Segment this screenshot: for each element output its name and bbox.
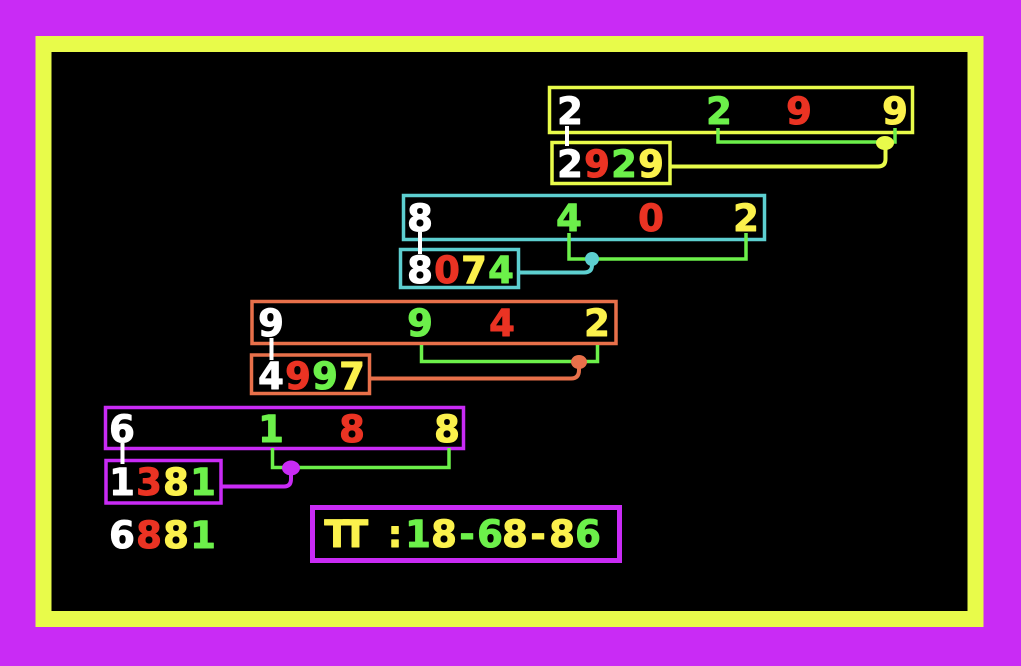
green bracket [569,233,746,259]
result digits 4997: 7 [339,355,365,398]
TT result callout: T [324,513,350,556]
top digits 6 1 8 8: 8 [434,408,460,451]
result digits 4997 [258,355,365,398]
top digits 9 9 4 2: 9 [258,302,284,345]
result digits 1381 [109,461,216,504]
TT result callout [312,508,620,560]
group 2: teal row [400,196,764,292]
top digits 9 9 4 2 [258,302,610,345]
green bracket [718,128,895,142]
top digits 8 4 0 2 [407,197,759,240]
result digits 4997: 9 [312,355,338,398]
TT result callout: 8 [549,513,575,556]
top digits 2 2 9 9: 9 [882,90,908,133]
top digits 8 4 0 2: 0 [638,197,664,240]
TT result callout: 8 [502,513,528,556]
orange connector with dot [370,355,587,378]
result box [552,142,670,184]
white link [270,338,274,360]
result digits 8074: 0 [434,249,460,292]
yellow connector with dot [671,136,894,166]
green bracket [272,448,449,468]
white link [418,232,422,254]
result digits 8074: 8 [407,249,433,292]
result digits 1381: 1 [109,461,135,504]
result box [106,460,221,503]
result digits 2929 [557,143,664,186]
TT result callout: : [388,513,402,556]
top digits 6 1 8 8: 8 [339,408,365,451]
TT result callout: T [343,513,369,556]
result digits 8074: 7 [461,249,487,292]
result box [400,250,518,288]
group 3: orange row [252,302,616,398]
white link [565,126,569,146]
TT result callout: 6 [575,513,601,556]
purple connector with dot [222,460,300,486]
result digits 8074: 4 [488,249,514,292]
top digits 6 1 8 8: 6 [109,408,135,451]
main black panel with yellow frame [44,44,976,619]
teal connector with dot [519,252,599,272]
result digits 2929: 2 [611,143,637,186]
result digits 8074 [407,249,514,292]
result digits 4997: 4 [258,355,284,398]
result digits 2929: 9 [584,143,610,186]
top number box [106,408,464,448]
top digits 2 2 9 9: 2 [706,90,732,133]
white link [120,443,124,464]
result box [252,355,370,394]
final number 6881 [109,514,216,557]
TT result callout: 1 [405,513,431,556]
top digits 6 1 8 8: 1 [258,408,284,451]
top digits 9 9 4 2: 2 [584,302,610,345]
top digits 8 4 0 2: 2 [733,197,759,240]
TT result callout: - [459,513,475,556]
top number box [404,196,764,240]
top digits 2 2 9 9: 9 [786,90,812,133]
TT result callout: - [530,513,546,556]
top digits 6 1 8 8 [109,408,460,451]
result digits 2929: 2 [557,143,583,186]
result digits 1381: 8 [163,461,189,504]
top digits 8 4 0 2: 8 [407,197,433,240]
final number 6881: 6 [109,514,135,557]
top digits 2 2 9 9 [557,90,908,133]
result digits 1381: 1 [190,461,216,504]
group 1: yellow row [550,88,912,186]
group 4: purple row [106,408,464,504]
final number 6881: 8 [136,514,162,557]
final number 6881: 1 [190,514,216,557]
green bracket [422,345,598,362]
result digits 4997: 9 [285,355,311,398]
TT result callout: 8 [431,513,457,556]
result digits 1381: 3 [136,461,162,504]
result digits 2929: 9 [638,143,664,186]
TT result callout: 6 [477,513,503,556]
top number box [550,88,912,132]
top digits 9 9 4 2: 4 [489,302,515,345]
top digits 2 2 9 9: 2 [557,90,583,133]
top digits 8 4 0 2: 4 [556,197,582,240]
final number 6881: 8 [163,514,189,557]
top digits 9 9 4 2: 9 [407,302,433,345]
top number box [252,302,616,344]
